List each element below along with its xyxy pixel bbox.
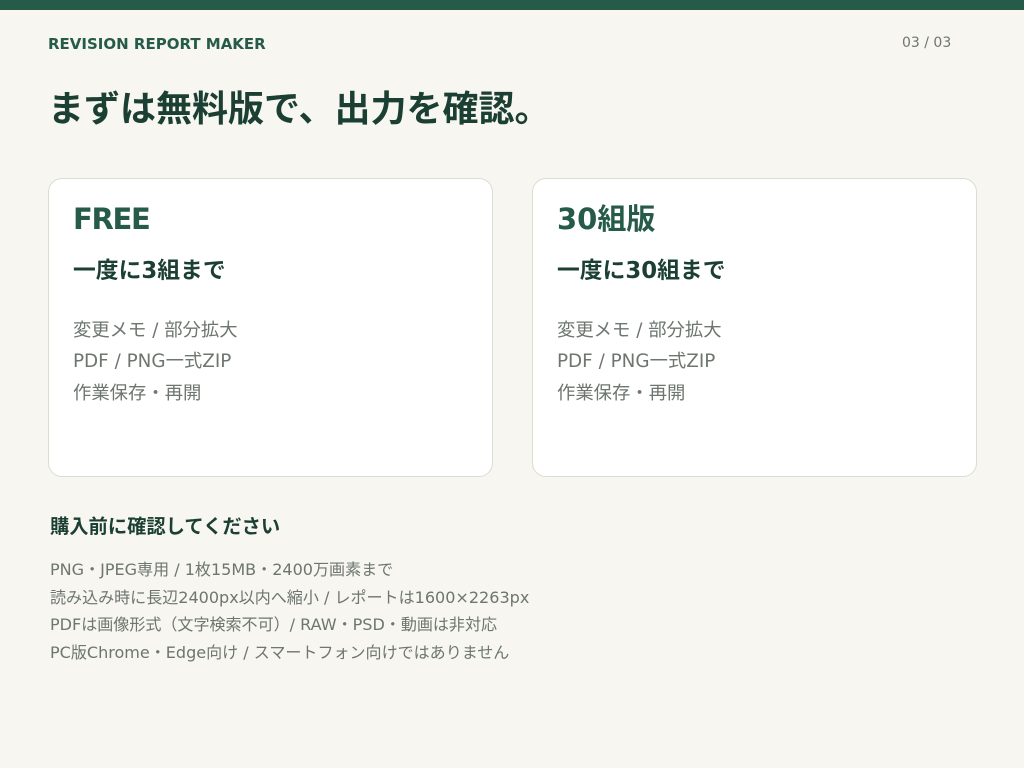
feature list: free: 作業保存・再開 xyxy=(73,383,201,404)
plan limit: 30 set: 一度に30組まで xyxy=(557,258,726,284)
plan name: free: FREE xyxy=(73,202,150,236)
panel: 30 set plan xyxy=(532,178,977,477)
notes list: PDFは画像形式（文字検索不可）/ RAW・PSD・動画は非対応 xyxy=(50,615,497,634)
notes list: PNG・JPEG専用 / 1枚15MB・2400万画素まで xyxy=(50,560,393,579)
plan name: 30 set: 30組版 xyxy=(557,202,655,236)
notes heading: 購入前に確認してください xyxy=(50,515,280,538)
feature list: 30 set: 作業保存・再開 xyxy=(557,383,685,404)
feature list: 30 set xyxy=(557,320,722,404)
title: まずは無料版で、出力を確認。 xyxy=(48,89,551,130)
notes list: PC版Chrome・Edge向け / スマートフォン向けではありません xyxy=(50,643,509,662)
plan limit: free: 一度に3組まで xyxy=(73,258,226,284)
page number: 03 / 03 xyxy=(902,35,951,51)
feature list: free: 変更メモ / 部分拡大 xyxy=(73,320,238,341)
notes list xyxy=(50,560,529,662)
feature list: free xyxy=(73,320,238,404)
feature list: 30 set: PDF / PNG一式ZIP xyxy=(557,351,715,372)
feature list: 30 set: 変更メモ / 部分拡大 xyxy=(557,320,722,341)
panel: free plan xyxy=(48,178,493,477)
notes list: 読み込み時に長辺2400px以内へ縮小 / レポートは1600×2263px xyxy=(50,588,529,607)
top bar xyxy=(0,0,1024,10)
brand label: REVISION REPORT MAKER xyxy=(48,35,266,53)
feature list: free: PDF / PNG一式ZIP xyxy=(73,351,231,372)
